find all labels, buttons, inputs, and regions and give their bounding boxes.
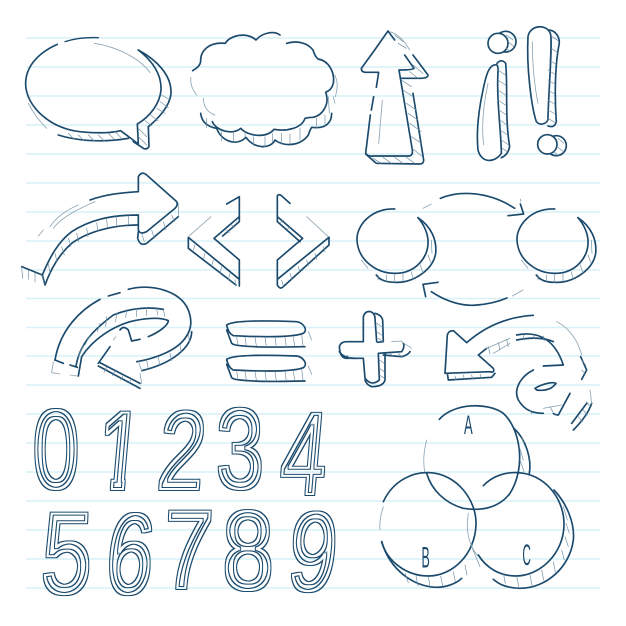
speech bubble (26, 38, 171, 149)
circle A (424, 406, 530, 509)
thought cloud (191, 33, 337, 147)
numbers zero to nine (34, 406, 336, 596)
digit 4: 4 (277, 389, 332, 520)
digit 2: 2 (154, 388, 211, 513)
flow circles with arrows (357, 193, 596, 305)
top flow arrow (440, 193, 524, 216)
label B: B (422, 542, 430, 574)
bottom bar (227, 355, 312, 382)
left circle (357, 209, 436, 282)
label A: A (464, 411, 473, 440)
right chevron (277, 195, 329, 288)
left chevron (188, 197, 239, 286)
equals sign (227, 321, 312, 382)
digit 7: 7 (161, 489, 215, 613)
circle B (380, 473, 480, 587)
digit 3: 3 (217, 387, 263, 513)
digit 8: 8 (223, 488, 273, 613)
spiral return arrow (52, 287, 192, 388)
digit 5: 5 (39, 489, 95, 618)
bottom flow arrow (423, 282, 507, 305)
looped left arrow (445, 315, 592, 430)
exclamation mark icon (528, 27, 566, 156)
digit 9: 9 (284, 490, 342, 614)
Venn diagram (380, 406, 574, 588)
top bar (227, 321, 312, 347)
right circle (517, 209, 596, 282)
plus sign (339, 312, 412, 387)
digit 0: 0 (33, 388, 79, 512)
up arrow (361, 31, 428, 164)
digit 1: 1 (92, 388, 149, 513)
circle C (467, 473, 574, 588)
letter i icon (477, 31, 516, 160)
curved right arrow (22, 173, 178, 285)
label C: C (522, 539, 531, 572)
digit 6: 6 (102, 491, 159, 618)
